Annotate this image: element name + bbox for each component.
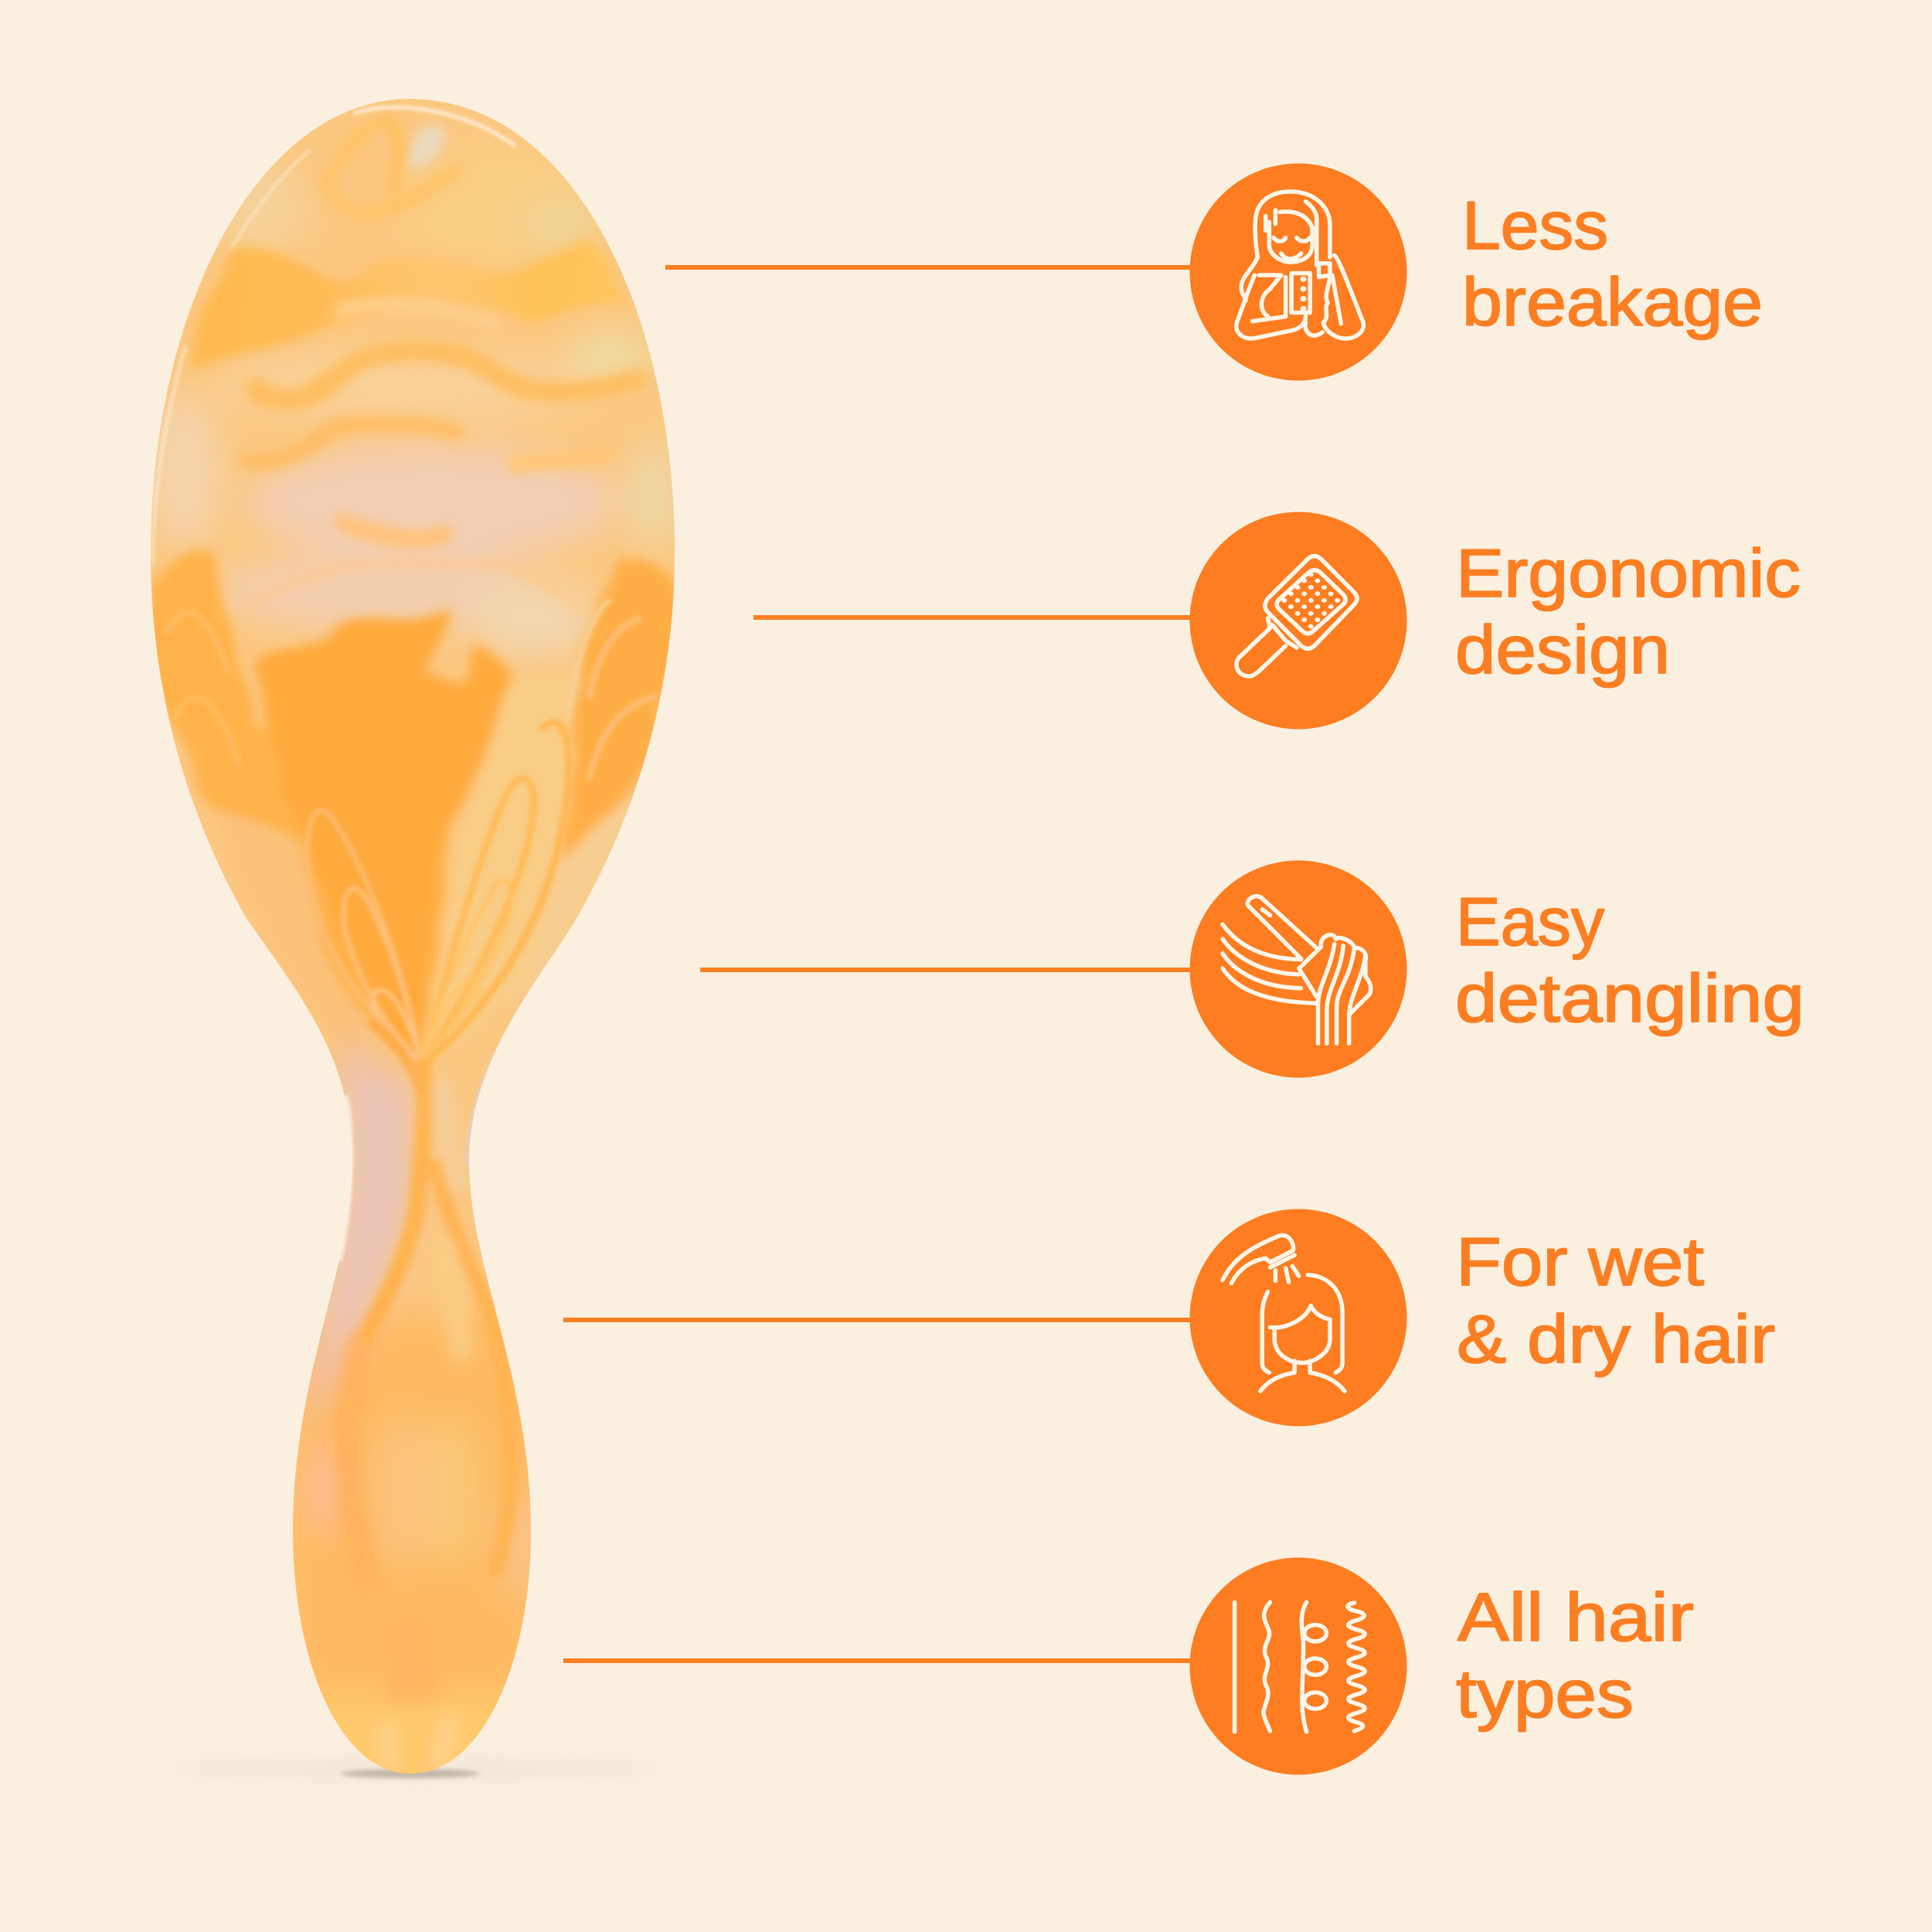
label: easy detangling: detangling — [1455, 960, 1804, 1036]
feature: for wet and dry hair — [1190, 1209, 1775, 1427]
label: ergonomic design: Ergonomic — [1456, 535, 1801, 611]
feature: less breakage — [1190, 164, 1763, 380]
feature: easy detangling — [1190, 861, 1804, 1077]
brush shadow — [170, 1754, 665, 1782]
marble: pale base tones — [151, 151, 676, 657]
circle badge 2 — [1190, 512, 1406, 730]
icon: hand combing hair strands — [1223, 896, 1371, 1043]
connector line 5 — [563, 1658, 1191, 1663]
label: all hair types — [1456, 1579, 1694, 1732]
brush glossy edge highlights — [152, 107, 514, 1260]
label: less breakage: Less — [1462, 187, 1608, 264]
circle badge 1 — [1190, 164, 1406, 380]
circle badge 5 — [1190, 1558, 1406, 1774]
marble: wavy bands — [246, 116, 638, 611]
marble: handle colours — [293, 1032, 531, 1774]
feature: all hair types — [1190, 1558, 1694, 1774]
icon: shower over woman's head — [1223, 1235, 1345, 1391]
connector line 2 — [753, 615, 1191, 620]
circle badge 4 — [1190, 1209, 1406, 1427]
connector line 4 — [563, 1318, 1191, 1322]
connector line 1 — [665, 265, 1191, 270]
label: all hair types: All hair — [1458, 1579, 1694, 1655]
connector line 3 — [700, 968, 1191, 972]
label: for wet and dry hair — [1456, 1223, 1775, 1377]
icon: four hair textures — [1235, 1602, 1365, 1732]
label: less breakage — [1462, 187, 1763, 340]
circle badge 3 — [1190, 861, 1406, 1077]
label: less breakage: breakage — [1462, 264, 1763, 340]
label: ergonomic design — [1455, 535, 1801, 688]
marble: orange side and heart masses — [143, 117, 684, 1097]
icon: woman brushing long hair — [1236, 192, 1363, 338]
marble: fine swirl lines — [166, 599, 657, 1090]
marbled hair brush — [151, 99, 675, 1774]
label: easy detangling — [1455, 883, 1804, 1036]
label: for wet and dry hair: & dry hair — [1457, 1301, 1775, 1377]
label: for wet and dry hair: For wet — [1456, 1223, 1704, 1300]
feature: ergonomic design — [1190, 512, 1801, 730]
label: all hair types: types — [1456, 1655, 1634, 1732]
label: ergonomic design: design — [1455, 611, 1670, 688]
icon: paddle brush — [1236, 556, 1357, 676]
label: easy detangling: Easy — [1456, 883, 1604, 960]
